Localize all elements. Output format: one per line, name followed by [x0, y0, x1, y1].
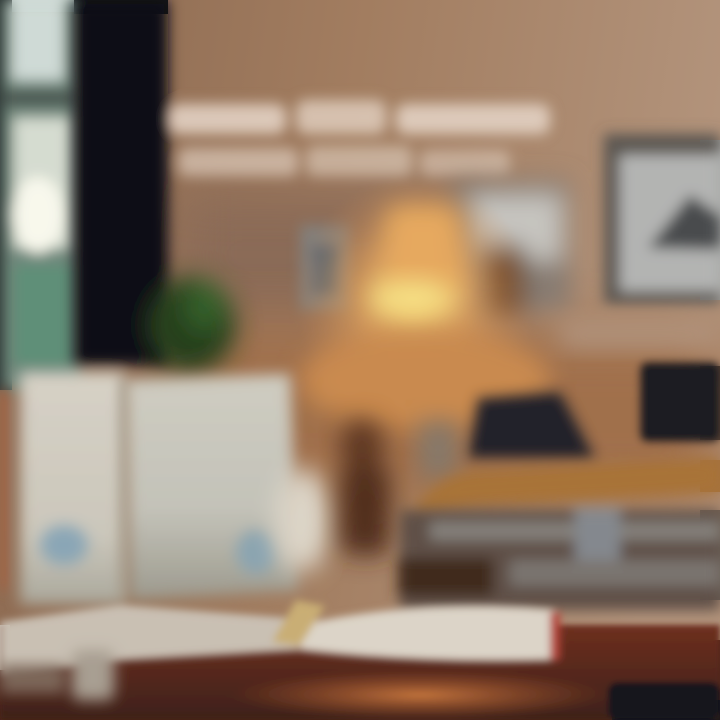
table base: [0, 640, 720, 720]
dark object right: [640, 362, 720, 442]
red book edge: [550, 612, 560, 660]
white round object: [274, 468, 330, 572]
large picture frame right: [604, 134, 720, 304]
wall darker band: [175, 190, 475, 320]
plant: [144, 277, 236, 373]
grey item by figure: [420, 422, 456, 478]
lying open book: [0, 600, 560, 700]
wall lower warm tone: [170, 330, 720, 500]
table: [0, 625, 720, 720]
blurred title: [168, 100, 550, 176]
icon: blue mark left: [40, 525, 88, 565]
table glow: [230, 670, 610, 720]
dark curtain: [74, 0, 168, 365]
book spine highlight: [272, 600, 325, 646]
brown figure: [340, 419, 390, 555]
window: [0, 0, 80, 390]
book stand: [72, 650, 114, 700]
lower shelf items: [398, 508, 720, 610]
small picture: [300, 225, 350, 310]
wooden shelf: [412, 458, 720, 515]
upright open book: [20, 372, 298, 604]
warm lit area: [300, 330, 550, 430]
lamp glow: [295, 175, 535, 425]
dark object on shelf: [468, 392, 595, 458]
middle picture frame: [452, 180, 570, 313]
left edge wall strip: [0, 390, 8, 590]
icon: blue mark right: [236, 530, 276, 574]
dark object on table: [608, 682, 720, 720]
wall shelf right: [560, 318, 720, 348]
